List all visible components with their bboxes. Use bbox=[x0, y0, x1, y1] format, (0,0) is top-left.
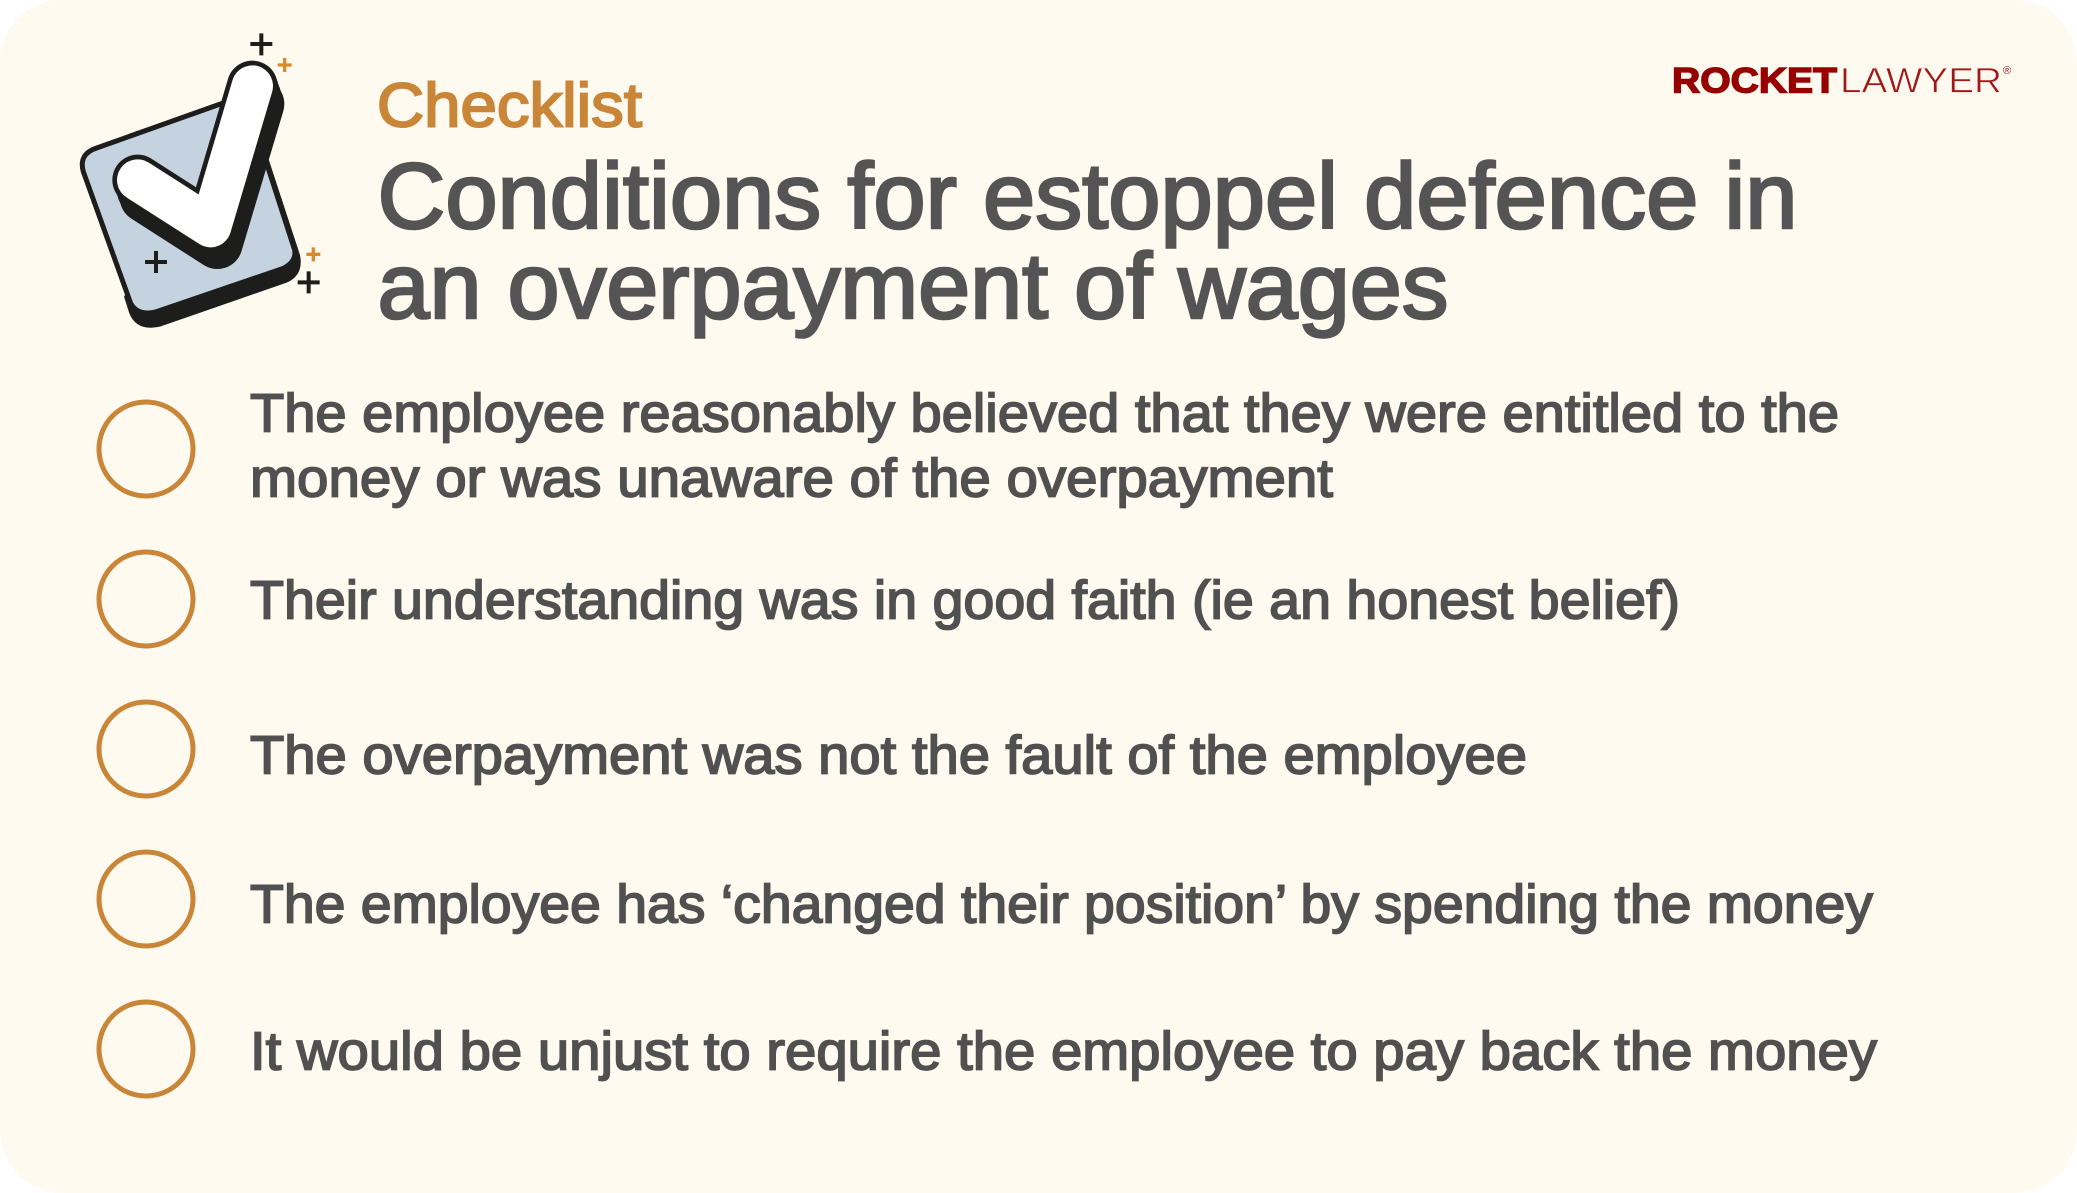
logo: Rocket Lawyer: LAWYER bbox=[1840, 62, 2002, 100]
checklist item 3: The overpayment was not the fault of the employee bbox=[250, 726, 1527, 786]
circle 5 bbox=[99, 1002, 193, 1096]
icon: tilted checkbox with tick bbox=[82, 33, 320, 328]
logo: Rocket Lawyer: ROCKET bbox=[1672, 62, 1837, 100]
label: Checklist: Checklist bbox=[377, 72, 642, 140]
circle 3 bbox=[99, 702, 193, 796]
checklist item 1: money or was unaware of the overpayment bbox=[250, 448, 1333, 508]
checklist item 1: The employee reasonably believed that they were entitled to the bbox=[250, 384, 1839, 444]
checklist item 5: It would be unjust to require the employee to pay back the money bbox=[250, 1022, 1877, 1082]
circle 4 bbox=[99, 852, 193, 946]
checklist item 4: The employee has ‘changed their position’ by spending the money bbox=[250, 874, 1873, 934]
checklist item 3 bbox=[99, 702, 1527, 796]
checklist item 2 bbox=[99, 552, 1680, 646]
heading: main title: Conditions for estoppel defence in bbox=[378, 144, 1798, 248]
heading: main title: an overpayment of wages bbox=[378, 234, 1448, 338]
heading: main title bbox=[378, 144, 1798, 338]
checklist item 1 bbox=[99, 384, 1839, 508]
logo: Rocket Lawyer: ® bbox=[2003, 65, 2011, 77]
logo: Rocket Lawyer bbox=[1672, 62, 2011, 100]
checklist item 4 bbox=[99, 852, 1873, 946]
checklist item 5 bbox=[99, 1002, 1877, 1096]
checklist item 2: Their understanding was in good faith (ie an honest belief) bbox=[250, 570, 1680, 630]
circle 1 bbox=[99, 402, 193, 496]
circle 2 bbox=[99, 552, 193, 646]
